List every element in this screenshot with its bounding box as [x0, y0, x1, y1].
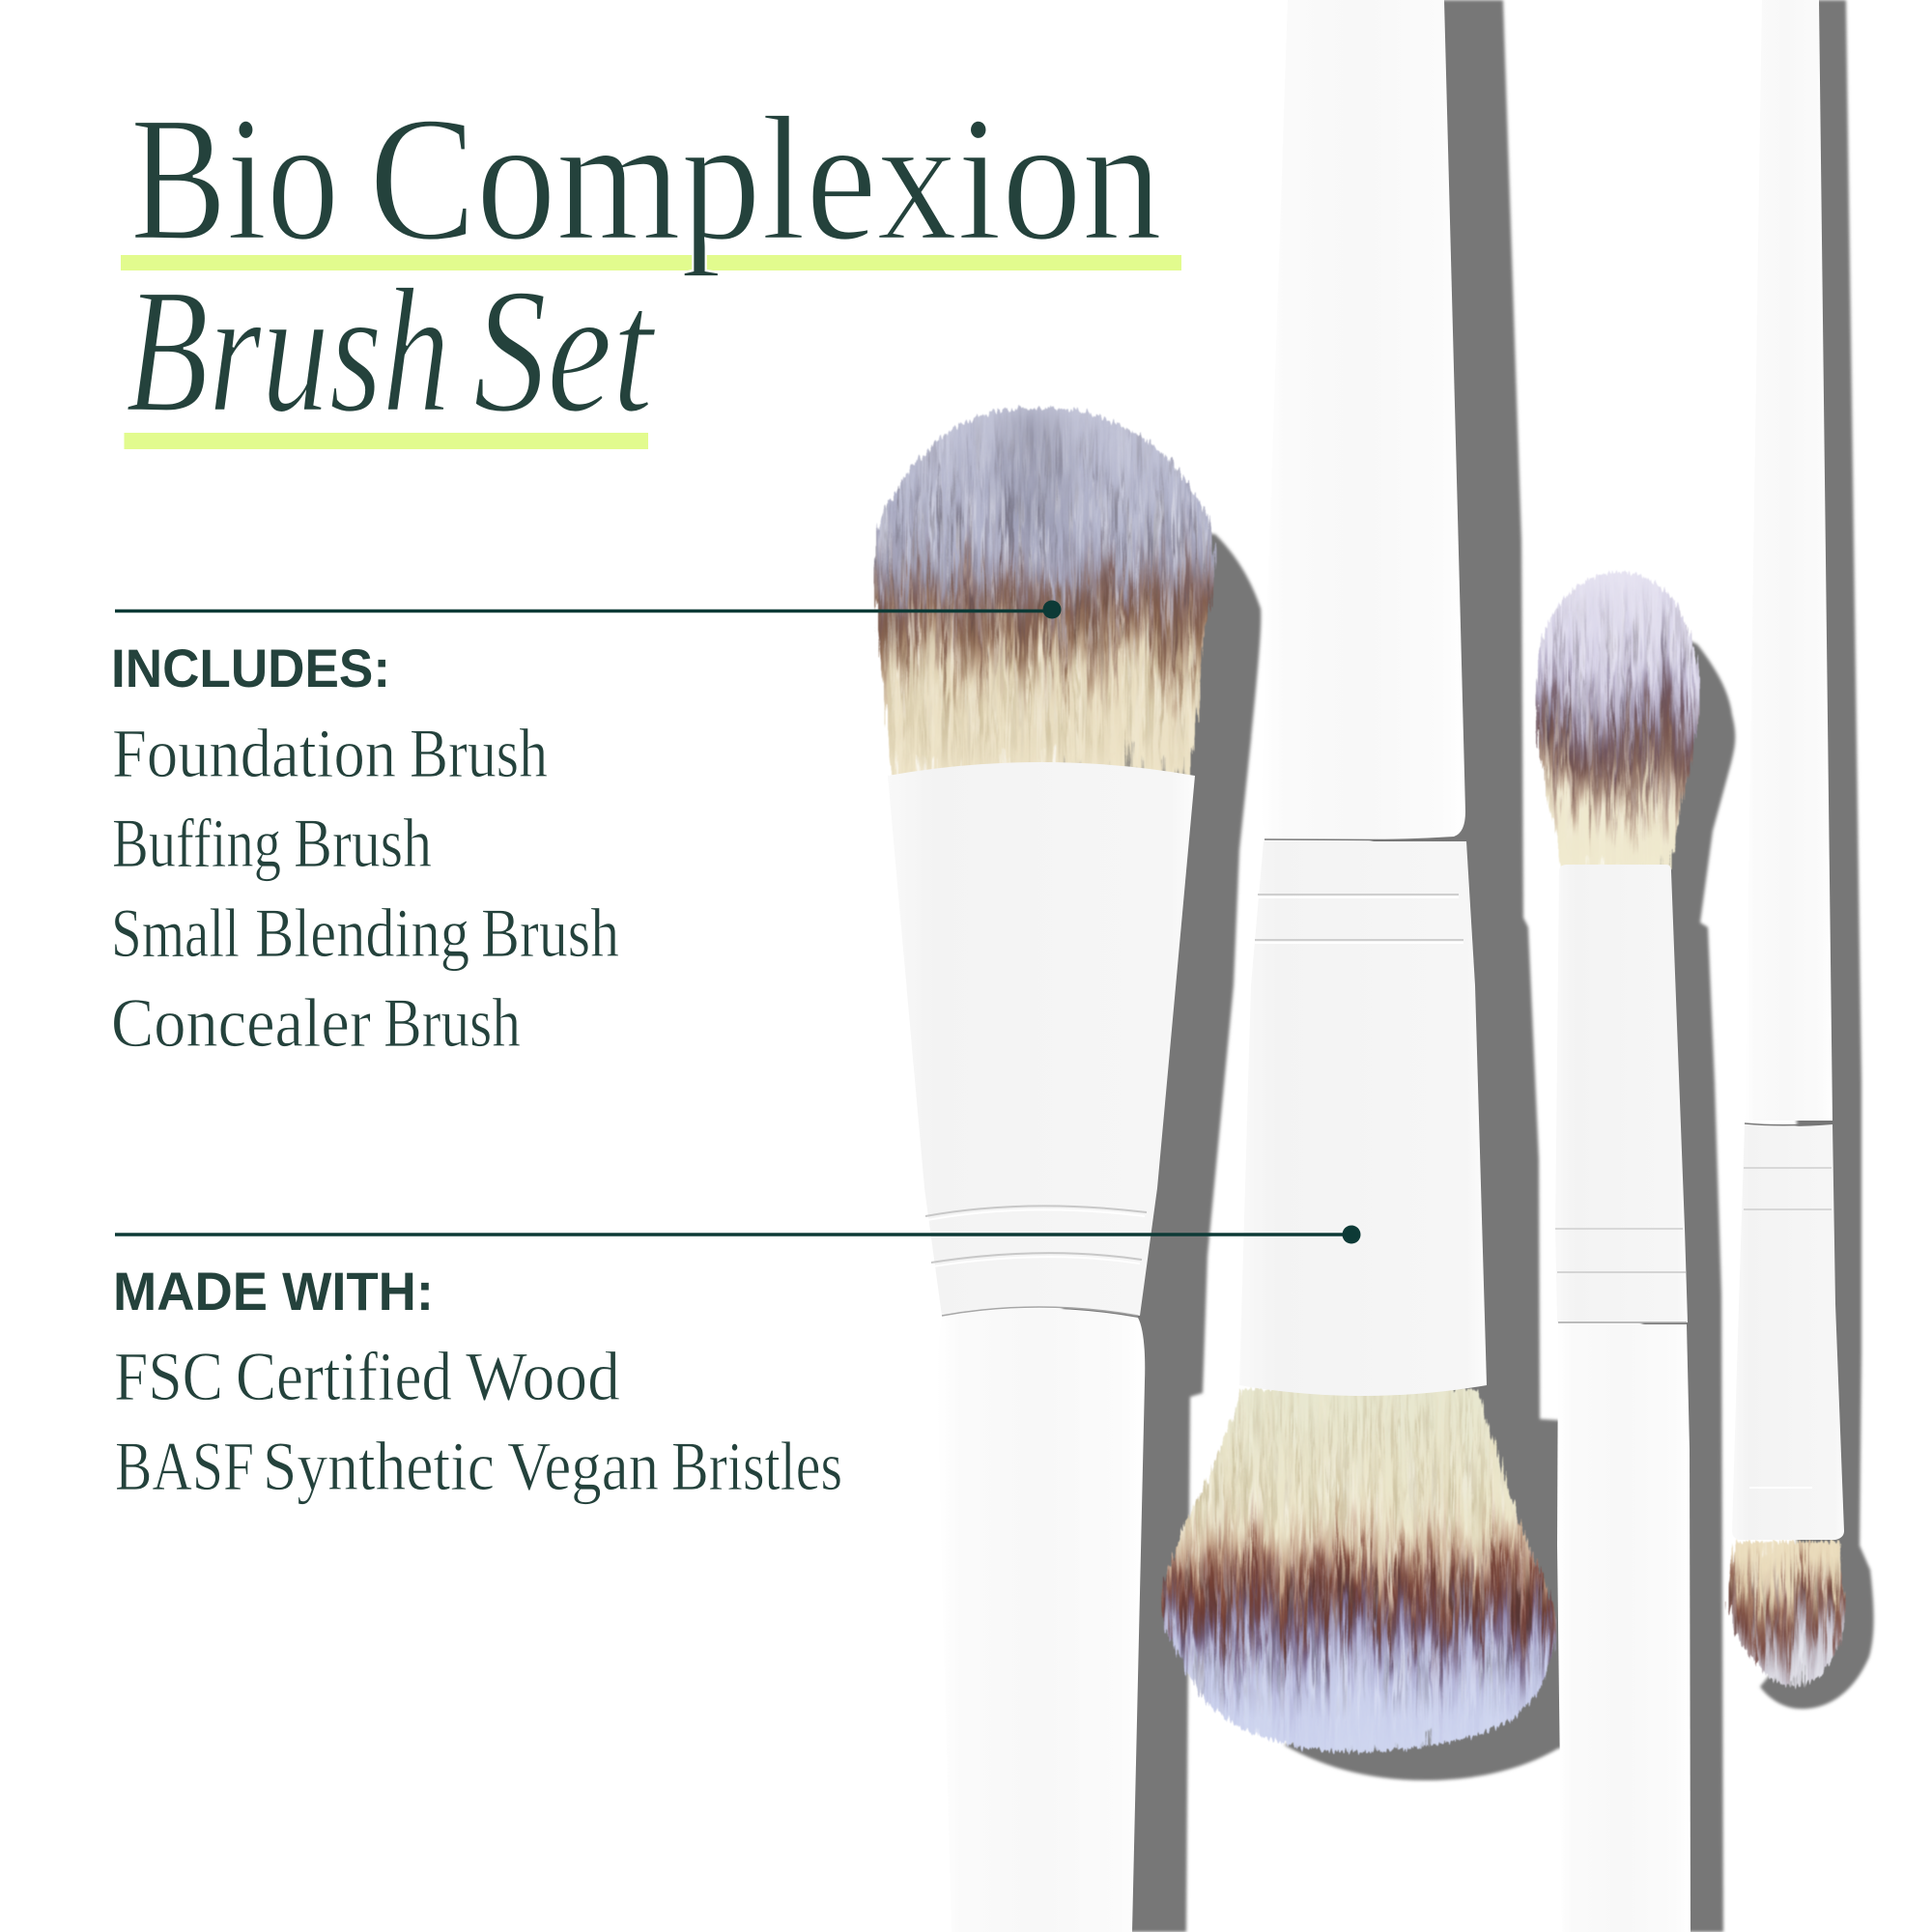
- brush: foundation: [850, 328, 1236, 1932]
- blending handle: [1557, 1324, 1690, 1932]
- shadow: small blending brush: [1642, 618, 1735, 1932]
- brush: concealer: [1724, 0, 1847, 1690]
- brush: small blending: [1517, 512, 1719, 1932]
- concealer ferrule: [1732, 1122, 1844, 1540]
- includes list: Brush: [294, 805, 432, 882]
- callout line: includes: [115, 601, 1061, 618]
- title: Brush: [126, 252, 450, 450]
- shadow: concealer brush: [1760, 0, 1874, 1709]
- made with list: [114, 1338, 842, 1505]
- title: Bio: [130, 80, 339, 278]
- blending ferrule: [1555, 865, 1688, 1322]
- title: Complexion: [369, 80, 1162, 278]
- made with list: Bristles: [671, 1428, 842, 1505]
- buffing handle: [1261, 0, 1465, 839]
- made with list: Vegan: [507, 1428, 659, 1505]
- foundation handle: [937, 1308, 1145, 1932]
- made with heading: MADE WITH:: [113, 1261, 434, 1321]
- callout line: made with: [115, 1225, 1360, 1244]
- buffing ferrule: [1239, 839, 1487, 1396]
- foundation bristles: [873, 404, 1217, 775]
- brush: buffing: [1140, 0, 1575, 1777]
- brush shadows: [1063, 0, 1874, 1932]
- made with list: Synthetic: [263, 1428, 495, 1505]
- includes list: Small: [111, 895, 240, 972]
- concealer handle: [1745, 0, 1833, 1121]
- includes list: Brush: [384, 984, 521, 1062]
- includes list: Blending: [255, 895, 469, 972]
- blending bristles: [1534, 570, 1700, 869]
- text block: made with: [113, 1261, 842, 1505]
- title: [126, 80, 1162, 450]
- title highlight bars: [121, 255, 1181, 449]
- concealer bristles: [1724, 1539, 1847, 1690]
- includes list: [111, 715, 619, 1062]
- shadow: foundation brush: [1063, 522, 1261, 1932]
- made with list: Certified: [236, 1338, 452, 1415]
- includes list: Concealer: [111, 984, 371, 1062]
- includes heading: INCLUDES:: [111, 638, 390, 698]
- includes list: Foundation: [112, 715, 396, 792]
- made with list: Wood: [466, 1338, 620, 1415]
- text block: includes: [111, 638, 619, 1062]
- includes list: Buffing: [112, 805, 281, 882]
- shadow: buffing brush: [1284, 0, 1584, 1780]
- includes list: Brush: [481, 895, 619, 972]
- includes list: Brush: [410, 715, 548, 792]
- title: Set: [473, 252, 657, 450]
- foundation ferrule: [888, 762, 1195, 1316]
- made with list: BASF: [115, 1428, 254, 1505]
- buffing bristles: [1161, 1387, 1557, 1755]
- made with list: FSC: [114, 1338, 223, 1415]
